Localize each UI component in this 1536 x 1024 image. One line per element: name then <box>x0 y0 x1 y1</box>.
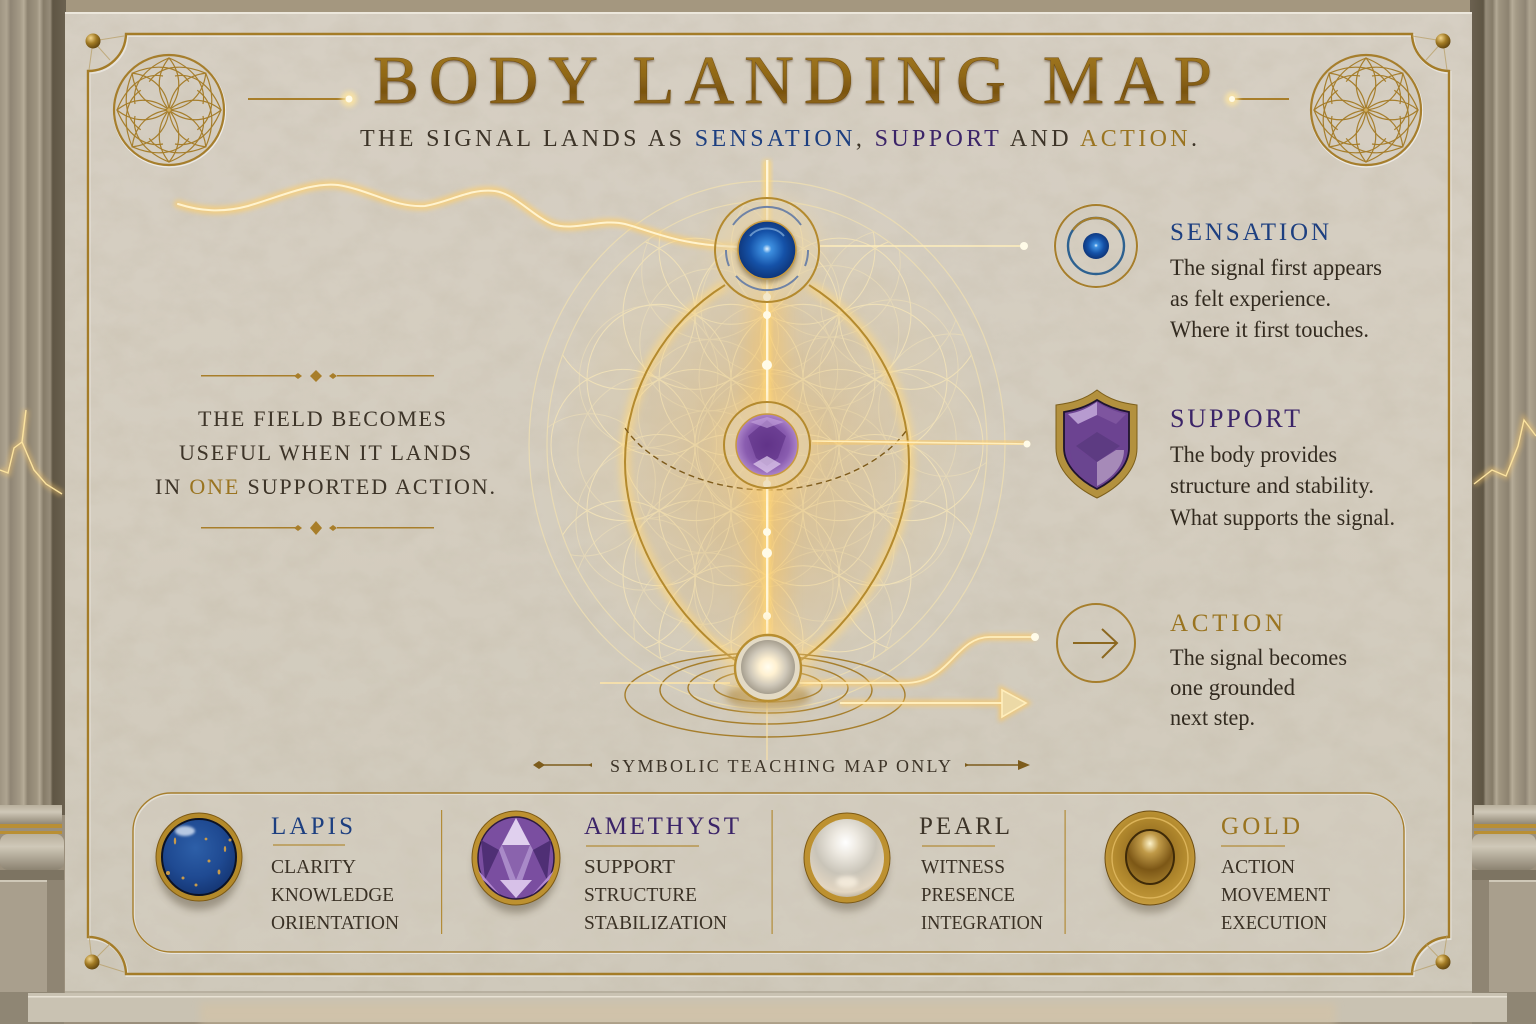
icon: arrow in circle <box>1057 604 1135 682</box>
amethyst text: AMETHYST <box>584 813 739 840</box>
body text: Where it first touches. <box>1170 317 1369 342</box>
subtitle: THE SIGNAL LANDS AS SENSATION, SUPPORT AND ACTION. <box>360 126 1197 152</box>
statement text: USEFUL WHEN IT LANDS <box>179 440 471 465</box>
legend: gold: EXECUTION <box>1221 912 1327 934</box>
legend: amethyst <box>472 811 739 934</box>
pearl gem <box>804 813 890 911</box>
legend: amethyst: STRUCTURE <box>584 884 697 906</box>
sacred geometry field <box>528 180 1006 710</box>
legend: lapis: KNOWLEDGE <box>271 884 394 906</box>
body text: What supports the signal. <box>1170 505 1395 530</box>
dashed diaphragm arc <box>625 428 908 490</box>
legend panel <box>133 793 1405 953</box>
legend: lapis: ORIENTATION <box>271 912 399 934</box>
action block <box>1057 604 1347 730</box>
lapis text: LAPIS <box>271 813 353 840</box>
sensation block <box>1054 204 1382 342</box>
body text: The signal becomes <box>1170 645 1347 670</box>
support block <box>1056 390 1395 530</box>
body text: as felt experience. <box>1170 286 1331 311</box>
rosette left <box>108 49 230 171</box>
rosette right <box>1305 49 1427 171</box>
left statement <box>155 370 495 535</box>
heading: SENSATION <box>1170 219 1329 246</box>
node: pearl <box>720 620 816 716</box>
legend: gold: ACTION <box>1221 856 1295 878</box>
body text <box>1170 442 1395 530</box>
connector: action path <box>800 633 1039 683</box>
ripple rings under pearl <box>600 653 905 760</box>
body text <box>1170 645 1347 730</box>
legend: gold <box>1105 811 1330 934</box>
body text: structure and stability. <box>1170 473 1374 498</box>
legend: pearl <box>804 813 1043 934</box>
title: BODY LANDING MAP <box>373 42 1212 118</box>
statement text: THE FIELD BECOMES <box>198 406 446 431</box>
gold gem <box>1105 811 1195 913</box>
legend: amethyst: SUPPORT <box>584 856 675 878</box>
action arrow <box>840 690 1026 717</box>
central spine with light nodes <box>748 160 786 670</box>
legend: amethyst: STABILIZATION <box>584 912 727 934</box>
legend: pearl: INTEGRATION <box>921 912 1043 934</box>
body text: one grounded <box>1170 675 1295 700</box>
legend: pearl: WITNESS <box>921 856 1005 878</box>
bottom divider <box>201 521 434 535</box>
side lightning <box>0 410 1536 494</box>
disclaimer note: SYMBOLIC TEACHING MAP ONLY <box>610 756 951 776</box>
incoming signal wave <box>178 185 745 247</box>
body text: The signal first appears <box>1170 255 1382 280</box>
connector: support <box>812 440 1030 448</box>
icon: concentric rings <box>1054 204 1138 288</box>
body text: The body provides <box>1170 442 1337 467</box>
node: lapis <box>715 198 819 302</box>
statement text <box>155 406 495 499</box>
lapis gem <box>156 813 242 910</box>
amethyst gem <box>472 811 560 913</box>
legend: gold: MOVEMENT <box>1221 884 1330 906</box>
icon: amethyst shield <box>1056 390 1137 498</box>
heading: SUPPORT <box>1170 404 1300 433</box>
heading: ACTION <box>1170 610 1283 637</box>
legend: lapis: CLARITY <box>271 856 356 878</box>
legend: lapis <box>156 813 399 934</box>
body outline <box>625 285 909 660</box>
top divider <box>201 370 434 382</box>
pearl text: PEARL <box>919 813 1010 840</box>
disclaimer note <box>533 756 1030 776</box>
gold text: GOLD <box>1221 813 1300 840</box>
floor ledge <box>28 993 1507 1024</box>
node: amethyst <box>719 397 815 493</box>
body text <box>1170 255 1382 342</box>
connector: sensation <box>820 242 1028 250</box>
statement text: IN ONE SUPPORTED ACTION. <box>155 474 495 499</box>
right column <box>1470 0 1536 1024</box>
legend: pearl: PRESENCE <box>921 884 1015 906</box>
left column <box>0 0 66 1024</box>
title side accents <box>248 91 1289 107</box>
body text: next step. <box>1170 705 1255 730</box>
